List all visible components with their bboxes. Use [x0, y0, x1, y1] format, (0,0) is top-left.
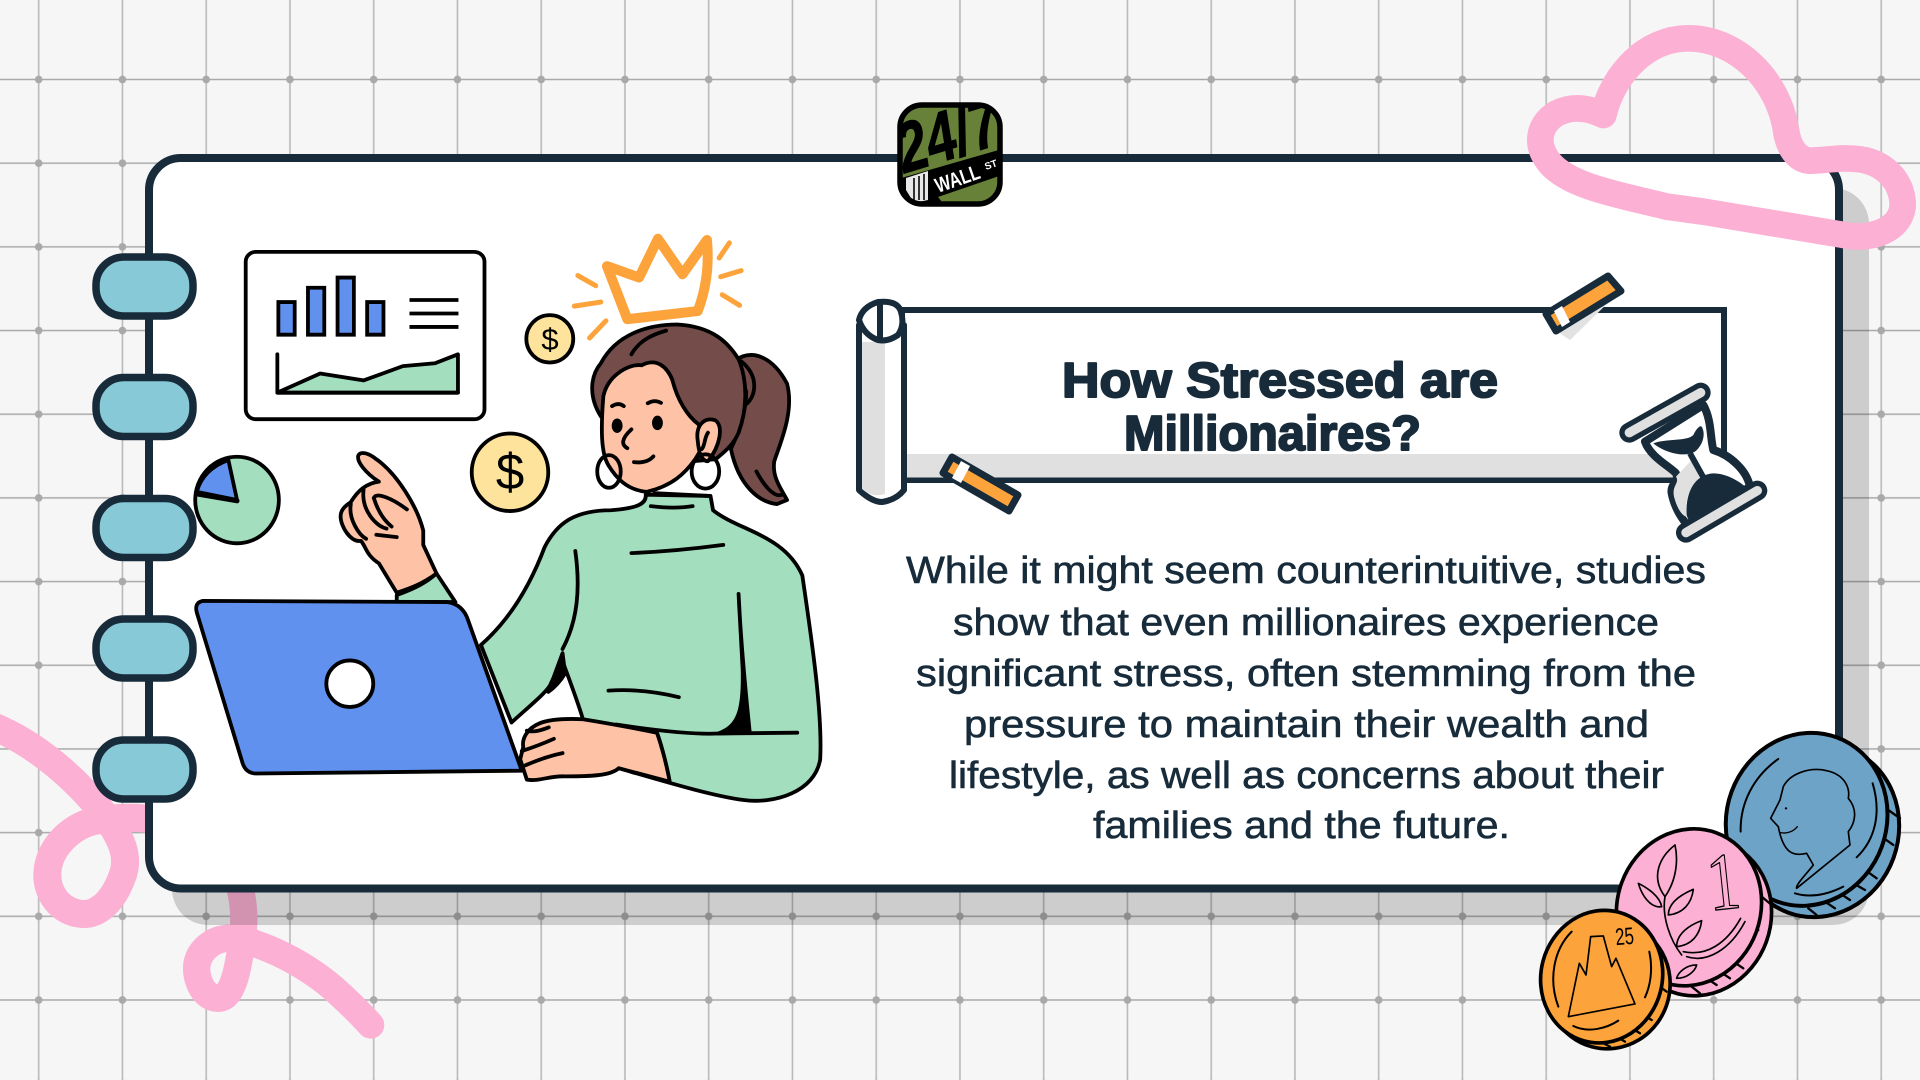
illustration: woman with laptop [195, 239, 821, 801]
pink scribble: left loop [0, 725, 153, 914]
small dollar coin [526, 315, 573, 362]
tape: top right [1546, 276, 1621, 340]
dollar sign: large coin: $ [496, 443, 524, 500]
logo: 24/7 Wall St: ST [983, 158, 999, 173]
body paragraph: pressure to maintain their wealth and [964, 704, 1649, 746]
body paragraph: While it might seem counterintuitive, studies [906, 550, 1706, 592]
head and face [592, 325, 782, 496]
card shadow [172, 188, 1869, 925]
sleeve cuff of raised arm [397, 574, 455, 602]
title: How Stressed are [1062, 354, 1498, 408]
orange coin: 25 [1614, 923, 1635, 951]
chart card [246, 252, 484, 419]
body paragraph: families and the future. [1093, 805, 1510, 847]
large dollar coin [472, 433, 548, 511]
typing hand [520, 719, 670, 782]
sweater torso and arm [481, 495, 821, 801]
pointing hand [341, 453, 437, 593]
logo: 24/7 Wall St [897, 102, 1003, 207]
title: Millionaires? [1124, 407, 1421, 461]
logo: 24/7 Wall St: 24/7 [892, 80, 1004, 189]
pink scribble: bottom loop [197, 880, 371, 1025]
scroll roll [859, 302, 904, 502]
dollar sign: small coin: $ [541, 322, 559, 357]
logo: 24/7 Wall St: WALL [932, 161, 983, 198]
pie chart [195, 457, 279, 543]
blue coin [1702, 710, 1920, 940]
orange coin [1526, 897, 1684, 1063]
ponytail [731, 355, 789, 504]
body paragraph [906, 550, 1706, 847]
body paragraph: show that even millionaires experience [953, 602, 1659, 644]
body paragraph: lifestyle, as well as concerns about their [949, 755, 1664, 797]
banner frame [902, 310, 1724, 480]
spiral rings [96, 257, 193, 799]
notebook panel [149, 158, 1839, 888]
scroll banner [859, 302, 1724, 502]
pink coin [1595, 808, 1793, 1016]
coins [1526, 710, 1920, 1063]
pink cloud scribble [1540, 38, 1903, 236]
crown [574, 239, 741, 338]
hourglass [1629, 393, 1757, 533]
sweater folds [548, 506, 797, 782]
title [1062, 354, 1498, 461]
tape: bottom left [943, 457, 1018, 511]
pink coin: 1 [1702, 835, 1744, 928]
laptop [196, 601, 522, 774]
body paragraph: significant stress, often stemming from the [916, 653, 1696, 695]
